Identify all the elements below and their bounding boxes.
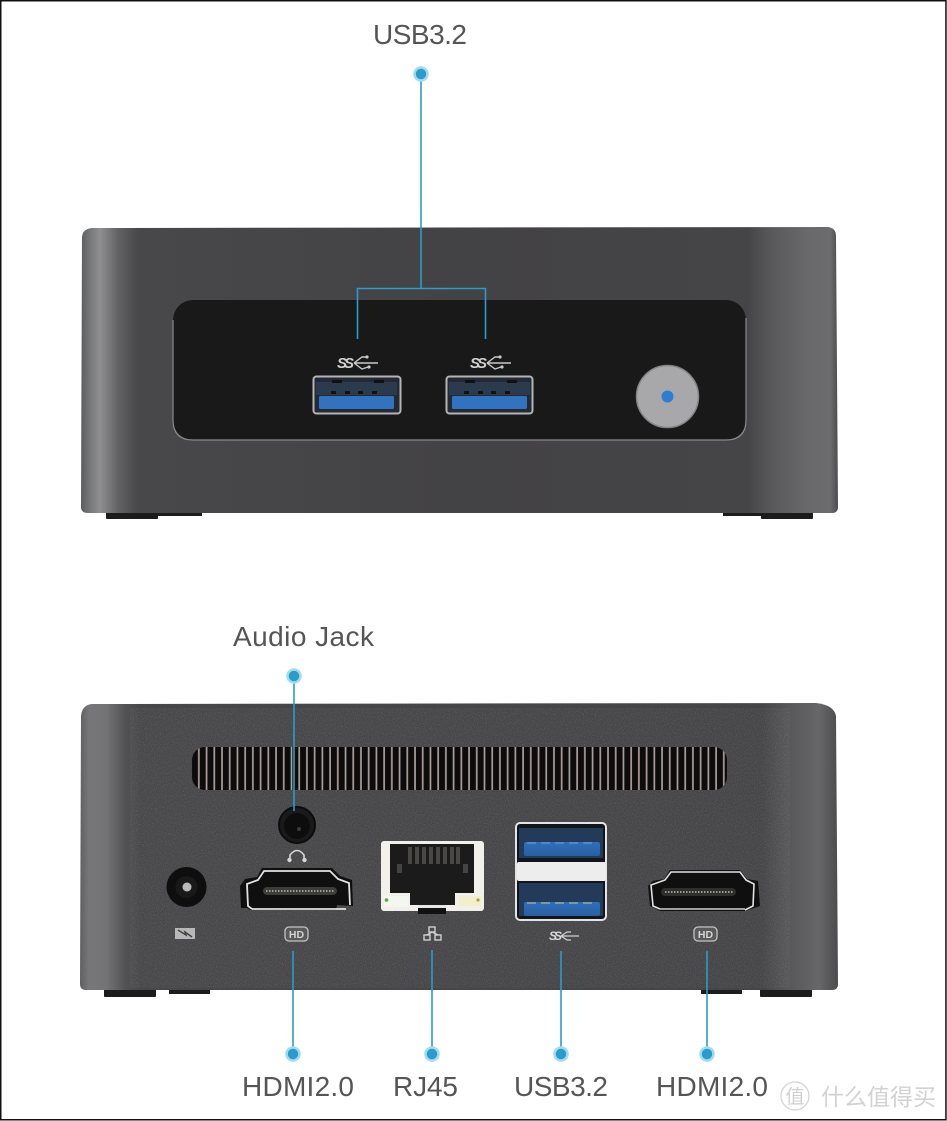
headphone icon [287, 850, 307, 862]
label: USB3.2 bottom: USB3.2 [514, 1071, 608, 1102]
marker: RJ45 [426, 1048, 438, 1060]
callout: HDMI2.0 left [242, 951, 354, 1102]
HDMI port right [648, 870, 760, 911]
connector line: RJ45 [431, 950, 433, 1054]
callout: HDMI2.0 right [656, 951, 768, 1102]
watermark [781, 1082, 936, 1110]
SS USB icon right [470, 355, 511, 372]
marker: Audio Jack [288, 670, 300, 682]
connector lines: USB3.2 top [358, 74, 486, 339]
SS USB icon right: SS [470, 355, 487, 372]
callout: USB3.2 top [358, 19, 486, 339]
connector line: Audio Jack [293, 676, 295, 811]
label: USB3.2 top: USB3.2 [373, 19, 467, 50]
marker: USB3.2 bottom [554, 1048, 568, 1060]
SS USB icon rear: SS [549, 929, 562, 943]
callout: USB3.2 bottom [514, 951, 608, 1102]
HDMI port left [240, 868, 353, 910]
HD icon left [285, 927, 308, 941]
HD icon right: HD [698, 929, 713, 941]
power button [636, 366, 698, 428]
DC power jack [166, 867, 206, 907]
ventilation slot [192, 747, 727, 790]
watermark: 什么值得买 [821, 1084, 936, 1110]
label: HDMI2.0 right: HDMI2.0 [656, 1071, 768, 1102]
SS USB icon left: SS [337, 355, 354, 372]
USB port right [446, 376, 532, 414]
connector line: HDMI2.0 right [706, 951, 708, 1054]
USB port left [314, 376, 400, 414]
rear view device [80, 703, 838, 997]
HD icon right [694, 927, 717, 941]
device feet: rear [104, 989, 812, 997]
connector line: HDMI2.0 left [292, 951, 294, 1054]
marker: HDMI2.0 right [700, 1048, 714, 1060]
device body: front [81, 227, 838, 513]
device feet: front [106, 512, 813, 519]
marker: USB3.2 top [414, 68, 428, 80]
device body: rear [80, 703, 838, 990]
callout: Audio Jack [233, 621, 375, 811]
label: RJ45: RJ45 [393, 1071, 458, 1102]
RJ45 port [381, 841, 484, 914]
DC icon [175, 928, 195, 939]
callout: RJ45 [393, 950, 458, 1102]
label: HDMI2.0 left: HDMI2.0 [242, 1071, 354, 1102]
label: Audio Jack: Audio Jack [233, 621, 375, 652]
front view device [81, 227, 838, 519]
marker: HDMI2.0 left [286, 1048, 300, 1060]
SS USB icon rear [549, 929, 579, 943]
front port panel [173, 300, 746, 440]
stacked USB ports [516, 823, 606, 920]
connector line: USB3.2 bottom [560, 951, 562, 1054]
SS USB icon left [337, 355, 378, 372]
network icon [424, 927, 441, 940]
HD icon left: HD [289, 929, 304, 941]
watermark: 值 [785, 1086, 805, 1108]
audio jack [279, 807, 315, 843]
